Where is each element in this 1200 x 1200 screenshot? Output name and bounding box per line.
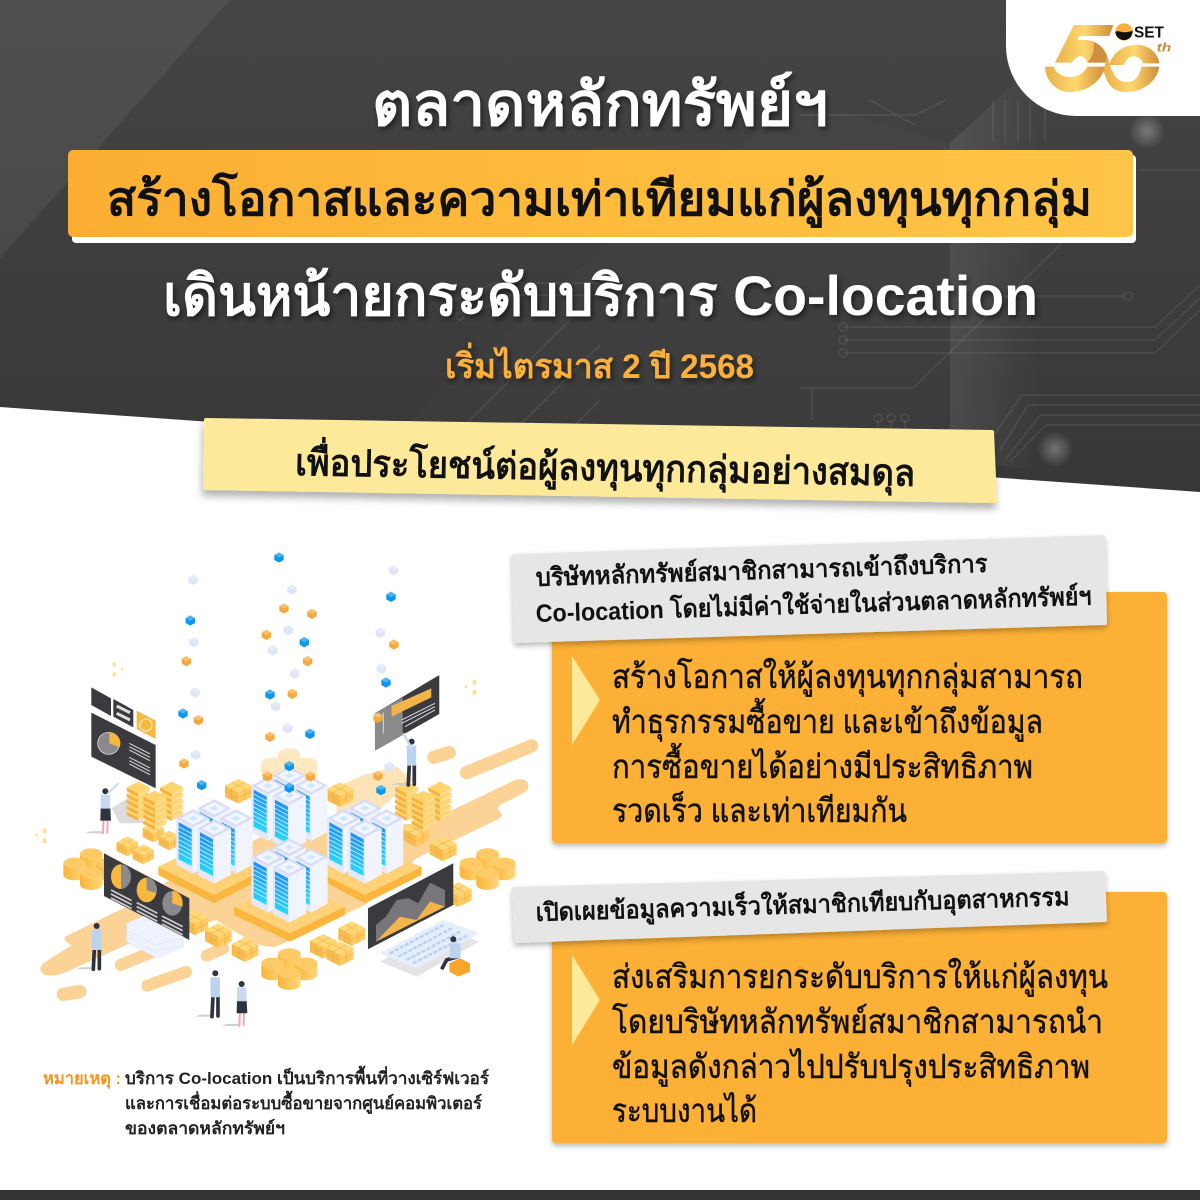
body text: สร้างโอกาสให้ผู้ลงทุนทุกกลุ่มสามารถ: [612, 658, 1083, 697]
server clusters: [176, 767, 403, 923]
footnote line 2: และการเชื่อมต่อระบบซื้อขายจากศูนย์คอมพิวเตอร์: [125, 1090, 483, 1115]
note text: เพื่อประโยชน์ต่อผู้ลงทุนทุกกลุ่มอย่างสมดุล: [295, 436, 916, 497]
body text: รวดเร็ว และเท่าเทียมกัน: [612, 791, 907, 829]
logo: SET 50th: SET: [1134, 25, 1165, 42]
dashboard screen: top right: [375, 675, 439, 751]
small yellow sparkles: [36, 662, 476, 843]
gold layered stacks: [127, 782, 452, 830]
body text: ระบบงานได้: [612, 1092, 757, 1129]
orange card: [552, 892, 1167, 1143]
body text: [612, 658, 1083, 829]
logo: SET 50th: th: [1157, 41, 1171, 55]
body text: การซื้อขายได้อย่างมีประสิทธิภาพ: [612, 743, 1033, 785]
tab line 1: บริษัทหลักทรัพย์สมาชิกสามารถเข้าถึงบริการ: [535, 549, 989, 592]
keyboard: [380, 920, 479, 977]
footnote label: หมายเหตุ :: [43, 1069, 121, 1089]
banner heading: สร้างโอกาสและความเท่าเทียมแก่ผู้ลงทุนทุกกลุ่ม: [107, 171, 1092, 229]
tab line 2: Co-location โดยไม่มีค่าใช้จ่ายในส่วนตลาดหลักทรัพย์ฯ: [535, 581, 1092, 628]
footnote: [43, 1065, 490, 1138]
floating data cubes: [178, 552, 399, 795]
chart screen: area chart: [368, 863, 453, 949]
arrow marker: [572, 955, 600, 1045]
gold crates: [117, 779, 472, 966]
dashboard screen: top left: [91, 687, 156, 788]
chart screen: pies: [104, 853, 189, 940]
subtitle: เดินหน้ายกระดับบริการ Co-location: [163, 264, 1038, 327]
people: [77, 733, 470, 1026]
body text: ทำธุรกรรมซื้อขาย และเข้าถึงข้อมูล: [612, 698, 1043, 742]
date line: เริ่มไตรมาส 2 ปี 2568: [445, 342, 754, 386]
yellow tilted note: [205, 420, 995, 501]
footnote line 1: บริการ Co-location เป็นบริการพื้นที่วางเซิร์ฟเวอร์: [125, 1065, 490, 1088]
body text: โดยบริษัทหลักทรัพย์สมาชิกสามารถนำ: [612, 1003, 1103, 1040]
logo corner panel: [1006, 0, 1200, 116]
highlight banner: [68, 150, 1136, 243]
grey tab: [514, 537, 1105, 641]
panel: disclosure: [514, 873, 1167, 1143]
dark header background: [0, 0, 1200, 492]
server platforms: [158, 840, 422, 942]
body text: ส่งเสริมการยกระดับบริการให้แก่ผู้ลงทุน: [612, 958, 1108, 997]
shadow under left stack: [112, 797, 145, 823]
title: ตลาดหลักทรัพย์ฯ: [372, 71, 828, 138]
body text: ข้อมูลดังกล่าวไปปรับปรุงประสิทธิภาพ: [612, 1048, 1090, 1087]
footnote line 3: ของตลาดหลักทรัพย์ฯ: [125, 1118, 285, 1138]
orange card: [552, 592, 1167, 843]
isometric data centre illustration: [36, 552, 532, 1026]
logo: SET 50th: [1045, 23, 1171, 92]
body text: [612, 958, 1108, 1129]
bottom dark strip: [0, 1190, 1200, 1200]
peach roads: [40, 746, 532, 994]
stacked white servers: [127, 916, 183, 958]
coin stacks: [63, 748, 516, 990]
grey tab: [514, 873, 1105, 941]
arrow marker: [572, 656, 600, 745]
panel: opportunity: [514, 537, 1167, 843]
tab text: เปิดเผยข้อมูลความเร็วให้สมาชิกเทียบกับอุตสาหกรรม: [535, 881, 1070, 929]
